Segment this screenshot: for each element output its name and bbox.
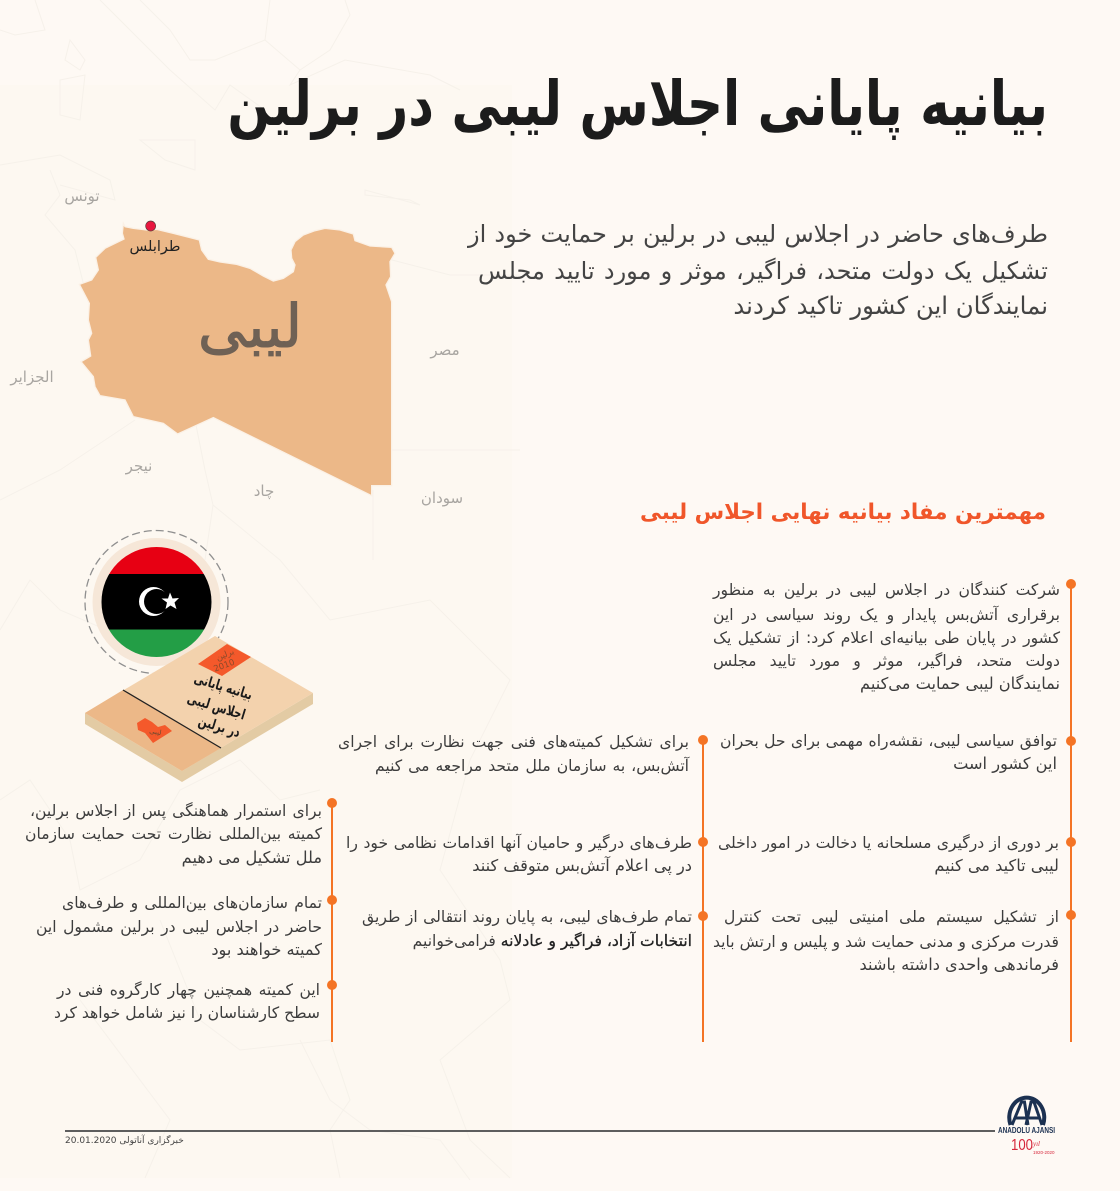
timeline column 3 [25,798,337,1042]
intro text block: نمایندگان این کشور تاکید کردند [733,291,1048,320]
map: Libya [78,220,396,496]
icon: Anadolu Agency logo: 100 [1011,1137,1033,1154]
text: point 3 [718,834,1059,875]
text: point 6 [346,834,692,875]
text: point 9: کمیته خواهند بود [211,940,322,959]
text: point 5: آتش‌بس، به سازمان ملل متحد مراجعه می کنیم [375,757,689,775]
icon: isometric document: اجلاس لیبی [185,689,248,723]
text: point 4: فرماندهی واحدی داشته باشند [860,955,1059,974]
text: point 4: از تشکیل سیستم ملی امنیتی لیبی تحت کنترل [724,908,1059,926]
label: Algeria: الجزایر [10,368,54,386]
text: point 1: دولت متحد، فراگیر، موثر و مورد تایید مجلس [713,652,1060,670]
icon: Libya flag [84,530,229,674]
footer rule [65,1130,995,1132]
timeline line and dots 2 [698,735,708,1042]
timeline line and dots 1 [1066,579,1076,1042]
text: point 10: سطح کارشناسان را نیز شامل خواهد کرد [54,1004,320,1022]
text: point 5 [338,733,690,775]
intro text block [467,220,1048,320]
text: point 6: در پی اعلام آتش‌بس متوقف کنند [472,856,692,875]
icon: isometric document [85,636,313,782]
text: point 2: این کشور است [953,754,1057,773]
text: point 9: حاضر در اجلاس لیبی در برلین مشمول این [36,918,322,936]
text: point 5: برای تشکیل کمیته‌های فنی جهت نظارت برای اجرای [338,733,689,751]
text: point 4: قدرت مرکزی و مدنی حمایت شد و پلیس و ارتش باید [713,933,1059,951]
label: Tunisia: تونس [64,187,100,205]
text: point 9 [36,894,322,959]
label: Egypt: مصر [430,341,460,359]
text: point 3: لیبی تاکید می کنیم [934,856,1059,875]
label: Tripoli: طرابلس [130,239,180,255]
text: point 2: توافق سیاسی لیبی، نقشه‌راه مهمی برای حل بحران [720,732,1057,750]
text: point 2 [720,732,1057,773]
label: Sudan: سودان [421,489,463,507]
footer credit: 20.01.2020 خبرگزاری آناتولی [65,1136,184,1146]
timeline column 1 [712,579,1076,1042]
icon: Anadolu Agency logo: 1920-2020 [1033,1150,1055,1155]
text: point 4 [713,908,1059,974]
text: point 10: این کمیته همچنین چهار کارگروه فنی در [57,981,320,999]
text: point 6: طرف‌های درگیر و حامیان آنها اقدامات نظامی خود را [346,834,692,852]
text: point 1: کشور در پایان طی بیانیه‌ای اعلام کرد: از تشکیل یک [713,629,1060,647]
text: point 10 [54,981,320,1022]
text: point 8 [25,802,322,867]
text: point 1: شرکت کنندگان در اجلاس لیبی در برلین به منظور [713,581,1060,599]
text: point 7 [362,908,692,950]
timeline column 2 [338,733,708,1042]
icon: isometric document: در برلین [197,712,242,741]
section heading: مهمترین مفاد بیانیه نهایی اجلاس لیبی [640,500,1046,525]
label: Libya: لیبی [198,292,302,362]
icon: isometric document: برلین [215,647,236,663]
text: point 1: برقراری آتش‌بس پایدار و یک روند سیاسی در این [713,606,1060,624]
text: point 9: تمام سازمان‌های بین‌المللی و طرف‌های [62,894,322,912]
text: point 7: تمام طرف‌های لیبی، به پایان روند انتقالی از طریق [362,908,692,926]
text: point 1 [712,581,1060,693]
intro text block: طرف‌های حاضر در اجلاس لیبی در برلین بر حمایت خود از [468,220,1048,248]
icon: Anadolu Agency logo: yıl [1032,1140,1040,1148]
text: point 8: برای استمرار هماهنگی پس از اجلاس برلین، [30,802,322,820]
label: Niger: نیجر [126,457,152,475]
icon: isometric document: بیانیه پایانی [192,669,255,703]
icon: isometric document: لیبی [149,727,162,737]
text: point 1: نمایندگان لیبی حمایت می‌کنیم [860,674,1060,693]
text: point 8: ملل تشکیل می دهیم [182,848,322,867]
intro text block: تشکیل یک دولت متحد، فراگیر، موثر و مورد تایید مجلس [478,257,1048,285]
text: point 7: انتخابات آزاد، فراگیر و عادلانه فرامی‌خوانیم [413,932,692,950]
label: Chad: چاد [254,482,274,500]
icon: Anadolu Agency logo [998,1096,1055,1155]
text: point 3: بر دوری از درگیری مسلحانه یا دخالت در امور داخلی [718,834,1059,852]
icon: isometric document: 2010 [212,658,236,675]
title: بیانیه پایانی اجلاس لیبی در برلین [227,69,1048,140]
text: point 8: کمیته بین‌المللی نظارت تحت حمایت سازمان [25,825,322,843]
timeline line and dots 3 [327,798,337,1042]
